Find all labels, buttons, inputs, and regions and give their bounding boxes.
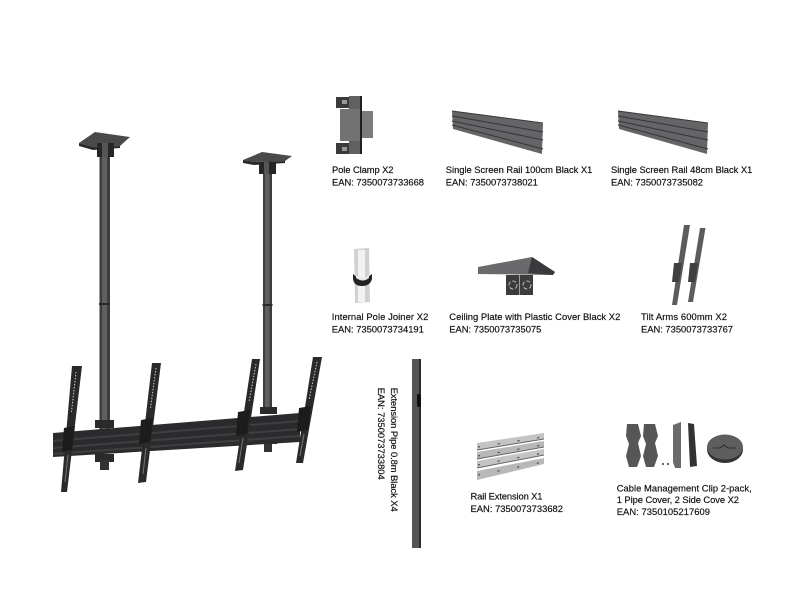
icon: pole joiner <box>353 248 372 303</box>
item: pole clamp <box>332 96 424 188</box>
ean: EAN: 7350105217609 <box>617 506 710 517</box>
ean: EAN: 7350073733682 <box>470 503 563 514</box>
item: extension pipe <box>376 359 421 548</box>
icon: rail extension <box>477 433 544 480</box>
item: cable management <box>617 422 752 517</box>
item: rail 48cm <box>611 111 752 188</box>
ean: EAN: 7350073733767 <box>641 324 733 334</box>
label: Rail Extension X1 <box>470 490 542 502</box>
tilt arm 1 <box>61 366 82 492</box>
label: Internal Pole Joiner X2 <box>332 311 428 322</box>
left ceiling plate <box>79 132 130 157</box>
label: Ceiling Plate with Plastic Cover Black X2 <box>449 311 620 322</box>
icon: side covers <box>673 422 697 468</box>
horizontal rail <box>53 413 300 457</box>
ean: EAN: 7350073734191 <box>332 324 424 334</box>
label: Single Screen Rail 48cm Black X1 <box>611 164 752 175</box>
label: Pole Clamp X2 <box>332 164 394 175</box>
icon: pole clamp <box>336 96 373 154</box>
icon: cable clips <box>626 424 669 467</box>
rotated ean: EAN: 7350073733804 <box>376 388 387 480</box>
item: tilt arms <box>641 225 733 334</box>
rotated label: Extension Pipe 0.8m Black X4 <box>389 388 400 512</box>
tilt arm 4 <box>296 357 322 463</box>
ean: EAN: 7350073735082 <box>611 176 703 188</box>
assembled ceiling mount product <box>53 132 322 492</box>
tilt arm 2 <box>138 363 161 483</box>
right ceiling plate <box>243 152 292 174</box>
label: Single Screen Rail 100cm Black X1 <box>446 164 592 175</box>
left pole <box>95 155 114 470</box>
tilt arm 3 <box>235 359 260 471</box>
ean: EAN: 7350073735075 <box>449 324 541 334</box>
label: Tilt Arms 600mm X2 <box>641 311 727 322</box>
item: rail extension <box>470 433 563 514</box>
item: internal pole joiner <box>332 248 428 334</box>
icon: rail <box>618 111 708 154</box>
ean: EAN: 7350073733668 <box>332 176 424 188</box>
icon: extension pipe <box>412 359 421 548</box>
icon: ceiling plate <box>478 257 555 295</box>
item: ceiling plate <box>449 257 620 334</box>
ean: EAN: 7350073738021 <box>446 176 538 188</box>
label line 1: Cable Management Clip 2-pack, <box>617 482 752 494</box>
icon: tilt arms <box>672 225 706 305</box>
icon: rail <box>452 111 543 154</box>
icon: pipe cover <box>707 434 743 463</box>
right pole <box>260 172 277 452</box>
label line 2: 1 Pipe Cover, 2 Side Cove X2 <box>617 494 739 505</box>
item: rail 100cm <box>446 111 592 188</box>
